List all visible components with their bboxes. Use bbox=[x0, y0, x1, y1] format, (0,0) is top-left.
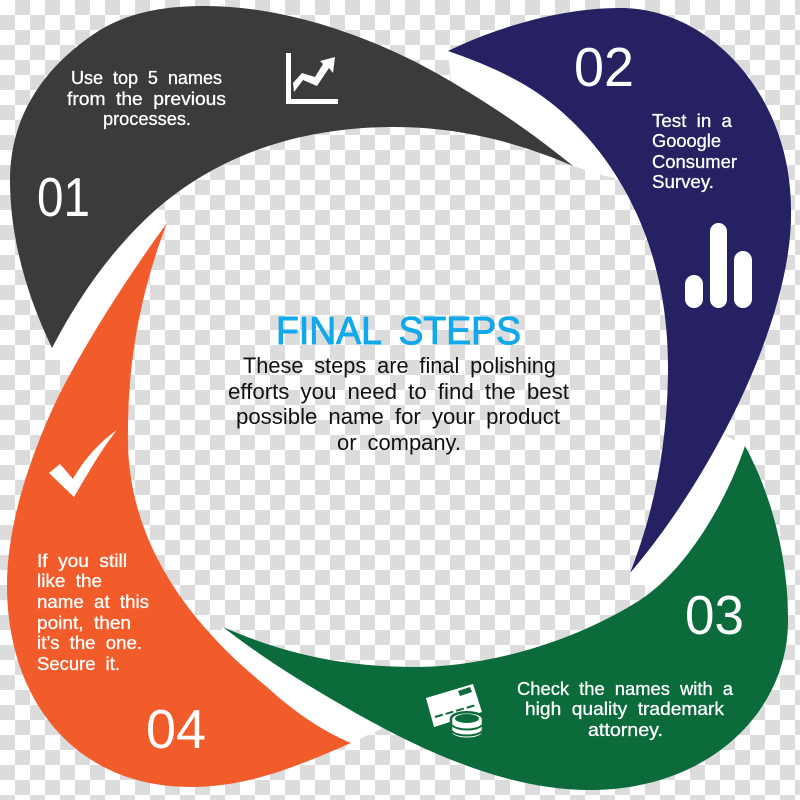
number 04: 04 bbox=[146, 698, 206, 760]
step 03 text bbox=[517, 678, 734, 740]
petal: green bbox=[223, 446, 788, 790]
step 01 text bbox=[67, 67, 226, 129]
number 03: 03 bbox=[685, 584, 744, 646]
step 01 text: Use top 5 names bbox=[71, 67, 222, 88]
center description: efforts you need to find the best bbox=[228, 379, 570, 404]
step 04 text: If you still bbox=[37, 550, 127, 571]
title: FINAL STEPS bbox=[276, 310, 521, 353]
step 03 text: Check the names with a bbox=[517, 678, 734, 699]
icon: card and coins bbox=[426, 684, 483, 739]
step 03 text: attorney. bbox=[588, 719, 663, 740]
step 02 text: Gooogle bbox=[652, 130, 721, 151]
icon: line chart bbox=[286, 53, 338, 104]
center description: or company. bbox=[337, 430, 461, 455]
step 02 text bbox=[652, 110, 737, 192]
petal: orange bbox=[7, 223, 351, 787]
number 01: 01 bbox=[37, 166, 90, 228]
panel: step 03 bbox=[223, 446, 788, 790]
number 02: 02 bbox=[574, 36, 634, 98]
step 01 text: from the previous bbox=[67, 88, 226, 109]
step 04 text: name at this bbox=[37, 591, 149, 612]
step 02 text: Consumer bbox=[652, 151, 737, 172]
center description: These steps are final polishing bbox=[243, 353, 556, 378]
center description bbox=[228, 353, 570, 455]
step 04 text: Secure it. bbox=[37, 653, 120, 674]
step 03 text: high quality trademark bbox=[525, 698, 725, 719]
icon: bar chart bbox=[685, 223, 752, 308]
panel: step 01 bbox=[10, 6, 573, 348]
step 04 text: point, then bbox=[37, 612, 131, 633]
step 04 text: like the bbox=[37, 570, 102, 591]
step 02 text: Test in a bbox=[652, 110, 733, 131]
step 04 text: it’s the one. bbox=[37, 632, 142, 653]
panel: step 04 bbox=[7, 223, 351, 787]
step 01 text: processes. bbox=[103, 108, 191, 129]
step 04 text bbox=[37, 550, 149, 674]
petal: navy bbox=[448, 8, 791, 573]
white gaps between petals bbox=[52, 51, 745, 743]
panel: step 02 bbox=[448, 8, 791, 573]
icon: check mark bbox=[49, 430, 117, 497]
step 02 text: Survey. bbox=[652, 171, 714, 192]
center description: possible name for your product bbox=[236, 404, 561, 429]
petal: dark bbox=[10, 6, 573, 348]
